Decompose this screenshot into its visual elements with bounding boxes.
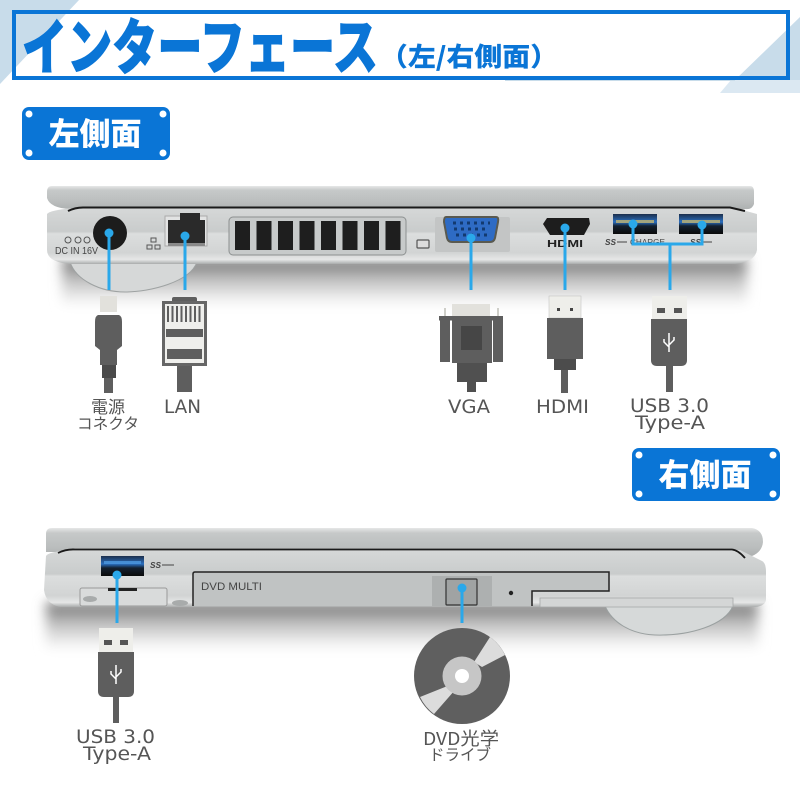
connector line: usb [628, 220, 706, 290]
usb port 1 [613, 214, 657, 234]
label: dvd: DVD光学 [423, 725, 499, 751]
label: dvd: ドライブ [429, 743, 491, 765]
icon: vga plug [439, 304, 503, 392]
label: usb right side [76, 726, 155, 765]
dvd tray lower [540, 598, 733, 607]
usb marking 2: SS [690, 238, 702, 247]
label: vga: VGA [448, 396, 490, 418]
body [47, 208, 757, 264]
label: usb right side: USB 3.0 [76, 726, 155, 748]
usb marking ss [605, 238, 627, 247]
connector line: lan [180, 232, 190, 290]
lan port [165, 213, 207, 246]
background triangle left [0, 0, 79, 84]
hinge foot left [70, 262, 197, 292]
gap [68, 207, 745, 211]
label: lan: LAN [164, 396, 201, 418]
icon: power plug [95, 296, 122, 393]
power label: DC IN 16V [55, 245, 98, 257]
badge: left side: 左側面 [48, 109, 142, 154]
icon: hdmi plug [547, 296, 583, 393]
icon: dvd disc [414, 628, 510, 724]
connector line: power [104, 228, 114, 290]
label: power: 電源 [91, 393, 125, 418]
eject button [432, 576, 492, 606]
icon: lan plug [164, 297, 206, 392]
gap [58, 549, 745, 558]
pin hole [509, 591, 513, 595]
power jack [93, 216, 127, 250]
label: power: コネクタ [77, 412, 139, 434]
lid [47, 186, 754, 209]
dvd tray [193, 572, 609, 606]
icon: usb plug right group [651, 296, 687, 392]
hdmi port [543, 218, 590, 235]
connector line: dvd [458, 584, 466, 623]
lid [46, 528, 763, 556]
label: usb right side: Type-A [82, 743, 151, 765]
dvd multi label: DVD MULTI [201, 581, 262, 593]
title box [14, 0, 788, 87]
usb marking: SS [150, 561, 162, 570]
card slot [80, 588, 167, 606]
label: power [77, 393, 139, 434]
badge: right side [632, 448, 780, 501]
label: hdmi: HDMI [536, 396, 589, 418]
label: usb: USB 3.0 [630, 395, 709, 417]
vga port [435, 217, 510, 252]
label: usb: Type-A [634, 412, 705, 434]
background triangle right [505, 17, 800, 93]
badge: left side [22, 107, 170, 160]
connector line: vga [466, 234, 476, 290]
label: dvd [423, 725, 499, 765]
usb marking charge: CHARGE [630, 238, 665, 247]
label: usb [630, 395, 709, 434]
title text: インターフェース [22, 0, 378, 87]
hdmi logo: HDMI [547, 239, 583, 250]
shadow under right laptop [46, 602, 758, 650]
badge: right side: 右側面 [658, 450, 752, 495]
title subtitle: （左/右側面） [380, 37, 558, 74]
shadow under left laptop [62, 258, 747, 306]
laptop right side [44, 528, 766, 607]
usb marking [150, 561, 174, 570]
screw [172, 600, 188, 606]
laptop left side [47, 186, 757, 264]
vent [229, 217, 406, 255]
monitor symbol [417, 240, 429, 248]
usb marking 2 [690, 238, 712, 247]
usb port [101, 556, 144, 576]
lan symbol [147, 238, 160, 249]
connector line: right usb [112, 570, 122, 623]
usb port 2 [679, 214, 723, 234]
usb marking ss: SS [605, 238, 617, 247]
connector line: hdmi [560, 224, 570, 290]
hinge foot right [605, 606, 733, 635]
power symbol [65, 237, 90, 243]
icon: usb plug left group [98, 628, 134, 723]
body [44, 550, 766, 607]
